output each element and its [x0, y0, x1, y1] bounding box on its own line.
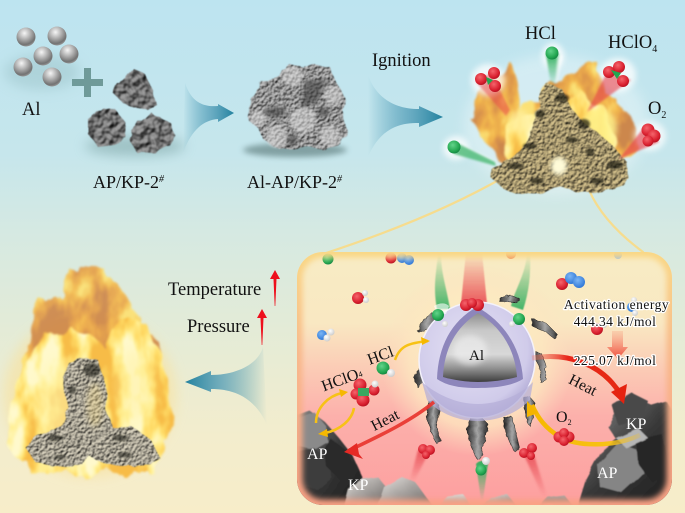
lower oxygen plumes: [410, 443, 547, 500]
label: AP/KP-2#: AP/KP-2: [93, 172, 159, 192]
arrow: temperature up: [270, 270, 280, 306]
O2 emission: [619, 121, 666, 159]
arrow: ignition: [368, 75, 443, 157]
small gas molecules: [317, 249, 638, 342]
arrows: AP to HClO4 cycle: [316, 393, 354, 433]
gas trails entering shell: [435, 252, 530, 310]
arrow head: Heat right: [611, 384, 627, 404]
label: Pressure: Pressure: [187, 317, 250, 337]
arrow: O2 to shell: [532, 405, 640, 444]
rock cluster: [25, 358, 160, 467]
core: [443, 313, 517, 382]
label: Al: Al: [22, 100, 40, 120]
arrow: Heat to AP: [348, 402, 434, 451]
label: HCl: HCl: [525, 24, 556, 44]
HClO4 emission left: [471, 64, 510, 116]
arrow: Heat to KP: [532, 357, 621, 395]
label: AP right: AP: [597, 465, 618, 482]
arrow head: O2: [527, 401, 538, 417]
label: Al-AP/KP-2#: #: [337, 174, 343, 185]
value: 444.34 kJ/mol: 444.34 kJ/mol: [574, 314, 656, 329]
plus sign: [72, 68, 103, 97]
label: Al core: Al: [469, 348, 484, 364]
label: HCl mechanism: HCl: [365, 343, 397, 369]
Al-AP/KP-2# composite particle: [243, 64, 347, 157]
HClO4 molecule: [350, 378, 380, 406]
HClO4 emission right: [587, 58, 636, 112]
label: HClO4 mechanism: HClO: [319, 366, 361, 395]
arrow: mixing: [183, 83, 234, 153]
label: Activation energy: Activation energy: [564, 297, 669, 312]
HCl emission lower-left: [443, 136, 497, 166]
flames: [468, 63, 640, 177]
arrow: energy reduction: [607, 331, 628, 359]
label: Temperature: Temperature: [168, 280, 261, 300]
arrow: pressure up: [257, 309, 267, 345]
AP tendrils on shell: [414, 295, 558, 459]
arrow: HCl to shell: [395, 341, 428, 360]
label: O2: 2: [661, 110, 666, 121]
upper flame: [28, 264, 158, 394]
label: KP left: KP: [348, 477, 369, 494]
arrow: thermal feedback: [185, 347, 267, 425]
label: Ignition: Ignition: [372, 51, 431, 71]
core highlight: [453, 335, 487, 365]
arrow head: Heat left: [344, 443, 363, 459]
HCl emission top: [542, 43, 564, 86]
molecules at shell surface: [432, 298, 525, 327]
label: O2: O: [648, 99, 661, 119]
burning propellant: [4, 264, 176, 477]
panel: reaction mechanism: [290, 249, 680, 508]
label: KP right: KP: [626, 416, 647, 433]
soft glowing panel edge: [297, 252, 672, 505]
label: AP/KP-2#: #: [159, 174, 165, 185]
label: Heat left: Heat: [368, 406, 403, 435]
label: HClO4: 4: [652, 44, 657, 55]
charred rock cluster: [490, 84, 628, 196]
connector lines to zoom panel: [326, 177, 643, 253]
right rock pile: [578, 393, 680, 505]
value: 225.07 kJ/mol: 225.07 kJ/mol: [574, 353, 656, 368]
label: HClO4: HClO: [608, 33, 652, 53]
arrow heads: cycle: [318, 389, 348, 437]
label: HClO4 mechanism: 4: [357, 369, 364, 379]
label: Heat right: Heat: [566, 371, 600, 400]
aluminium core-shell particle: [419, 302, 535, 421]
left rock pile: [290, 410, 572, 508]
Al particles: [4, 26, 80, 90]
label: AP left: AP: [307, 446, 328, 463]
label: O2 mechanism: O: [556, 409, 568, 426]
lower flame: [8, 313, 170, 475]
label: O2 mechanism: 2: [568, 418, 572, 427]
arrow head: HCl: [421, 337, 430, 345]
burning particle: [464, 55, 648, 196]
label: Al-AP/KP-2#: Al-AP/KP-2: [247, 172, 337, 192]
AP/KP-2# rock particles: [85, 69, 185, 156]
HCl molecule: [376, 362, 395, 377]
O2 molecule: [554, 428, 574, 446]
